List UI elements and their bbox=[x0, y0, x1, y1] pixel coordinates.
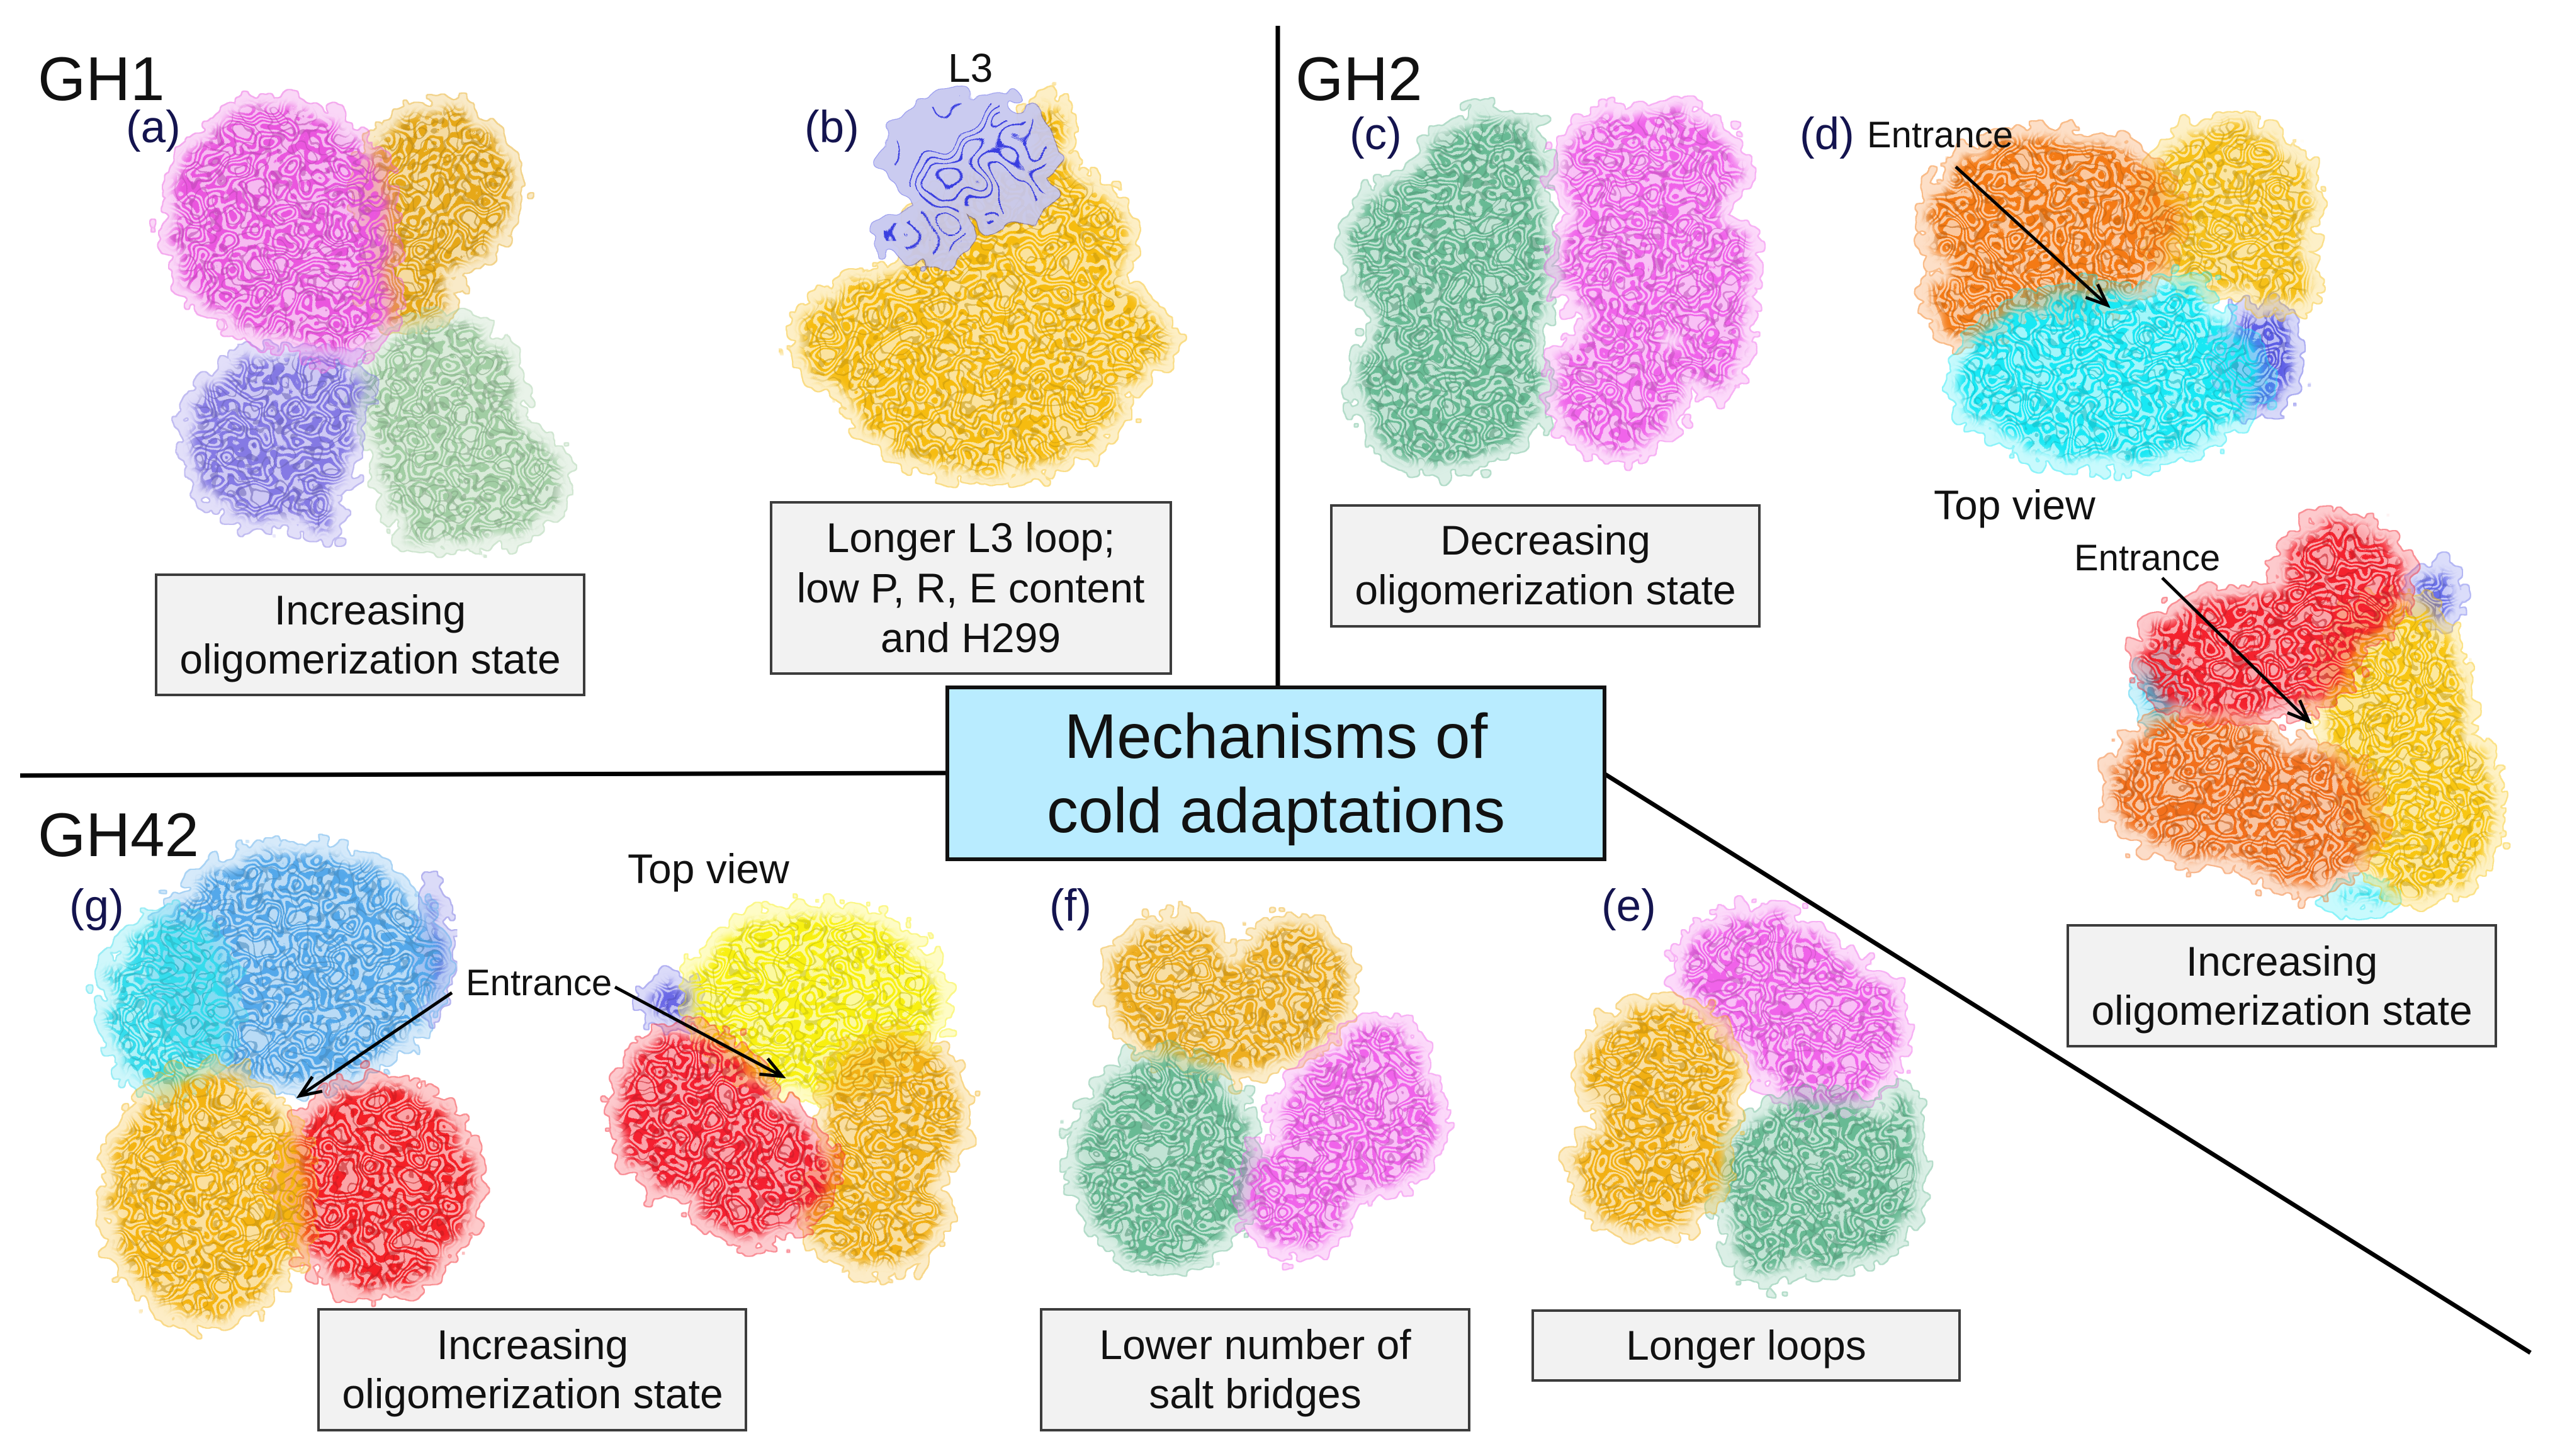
caption (e) bbox=[1533, 1311, 1960, 1380]
annotation: entrance, GH42 with two arrows bbox=[300, 962, 782, 1096]
subunit: red bbox=[607, 1023, 837, 1246]
central title box: cold adaptations bbox=[1047, 776, 1505, 846]
subunit: gold bbox=[353, 98, 522, 337]
central title box: Mechanisms of bbox=[1064, 701, 1487, 772]
protein (d): GH2 side view bbox=[1917, 115, 2323, 473]
subunit: gold bbox=[2134, 115, 2323, 317]
subunit: sage green bbox=[353, 308, 573, 554]
caption (d) bbox=[2068, 925, 2496, 1046]
protein (g): GH42 side view bbox=[98, 840, 482, 1329]
protein (a): GH1 tetramer bbox=[161, 94, 573, 554]
panel labels: (f) bbox=[1049, 881, 1091, 931]
caption (c): oligomerization state bbox=[1355, 567, 1736, 613]
protein (b): GH1 monomer with L3 loop bbox=[787, 88, 1177, 482]
subunit: magenta bbox=[161, 94, 400, 365]
caption (d): Increasing bbox=[2186, 938, 2377, 985]
panel labels: (a) bbox=[126, 103, 181, 152]
heading: GH1: GH1 bbox=[38, 44, 165, 113]
caption (g): Increasing bbox=[437, 1321, 628, 1368]
subunit: orange bbox=[2099, 705, 2386, 897]
caption (g): oligomerization state bbox=[342, 1370, 723, 1417]
body: gold monomer bbox=[787, 88, 1177, 482]
caption (b) bbox=[771, 502, 1171, 674]
annotation: entrance, GH2 top view: Entrance bbox=[2074, 538, 2220, 578]
caption (a): oligomerization state bbox=[179, 636, 561, 682]
caption (b): low P, R, E content bbox=[797, 565, 1144, 611]
panel labels: (e) bbox=[1601, 881, 1656, 931]
annotation: entrance, GH2 side view: Entrance bbox=[1867, 115, 2013, 155]
subunit: orchid bbox=[1234, 1010, 1448, 1259]
divider: horizontal line above GH42 bbox=[20, 773, 947, 776]
L3 loop: blue bbox=[869, 91, 1056, 263]
panel labels: (d) bbox=[1800, 110, 1854, 159]
annotation: entrance, GH2 side view bbox=[1867, 115, 2107, 305]
divider: diagonal line from title box to lower right bbox=[1605, 774, 2530, 1353]
central title box bbox=[947, 687, 1605, 859]
caption (b): and H299 bbox=[881, 614, 1061, 661]
subunit: cyan bbox=[2324, 878, 2397, 916]
panel labels bbox=[69, 103, 1854, 931]
subunit: green bbox=[1709, 1083, 1929, 1287]
subunit: sky blue bbox=[145, 840, 447, 1092]
subunit: gold bbox=[1567, 995, 1747, 1240]
divider: vertical line between GH1 and GH2 bbox=[1275, 26, 1280, 687]
caption (a): Increasing bbox=[274, 587, 466, 633]
caption (d): oligomerization state bbox=[2091, 987, 2473, 1034]
caption (c): Decreasing bbox=[1440, 517, 1650, 563]
protein (e): GH42 trimer bbox=[1567, 903, 1929, 1287]
caption (f): salt bridges bbox=[1149, 1370, 1362, 1417]
label: L3: L3 bbox=[948, 45, 993, 91]
subunit: light blue bbox=[2133, 648, 2186, 730]
caption (g) bbox=[319, 1309, 746, 1430]
subunit: gold bbox=[796, 1026, 973, 1278]
heading: GH2: GH2 bbox=[1295, 44, 1423, 113]
subunit: gold bbox=[2310, 589, 2505, 906]
subunit: periwinkle bbox=[2214, 299, 2305, 419]
subunit: gold bbox=[99, 1063, 316, 1329]
heading: GH42: GH42 bbox=[38, 800, 199, 869]
caption (f) bbox=[1041, 1309, 1469, 1430]
subunit: cyan bbox=[98, 906, 242, 1102]
protein (d): GH2 top view bbox=[2099, 512, 2505, 916]
panel labels: (g) bbox=[69, 881, 124, 931]
label: Top view (GH2): Top view bbox=[1934, 482, 2095, 528]
annotation: entrance, GH2 top view bbox=[2074, 538, 2309, 721]
annotation: entrance, GH42 with two arrows: Entrance bbox=[466, 962, 612, 1003]
panel labels: (b) bbox=[804, 103, 859, 152]
caption (a) bbox=[156, 575, 584, 695]
label: Top view (GH42): Top view bbox=[628, 845, 789, 892]
caption (b): Longer L3 loop; bbox=[826, 514, 1115, 561]
subunit: red bbox=[2131, 512, 2414, 724]
subunit: periwinkle bbox=[2405, 560, 2468, 629]
subunit: green bbox=[1341, 107, 1558, 478]
subunit: orange bbox=[1917, 126, 2187, 347]
caption (c) bbox=[1331, 505, 1759, 626]
subunit: periwinkle bbox=[417, 869, 452, 1020]
subunit: gold bbox=[1102, 910, 1356, 1083]
subunit: red bbox=[274, 1073, 482, 1300]
subunit: orchid bbox=[1671, 903, 1910, 1117]
subunit: lavender bbox=[178, 343, 375, 546]
protein (f): GH42 trimer bbox=[1067, 910, 1448, 1275]
subunit: yellow bbox=[682, 900, 949, 1102]
subunit: orchid bbox=[1545, 101, 1763, 463]
caption (e): Longer loops bbox=[1626, 1322, 1866, 1369]
panel labels: (c) bbox=[1350, 110, 1402, 159]
caption (f): Lower number of bbox=[1099, 1321, 1411, 1368]
subunit: periwinkle bbox=[639, 969, 702, 1032]
protein (g): GH42 top view bbox=[607, 900, 973, 1278]
protein (c): GH2 dimer bbox=[1341, 101, 1763, 478]
subunit: green bbox=[1067, 1048, 1262, 1275]
subunit: cyan bbox=[1946, 271, 2271, 473]
